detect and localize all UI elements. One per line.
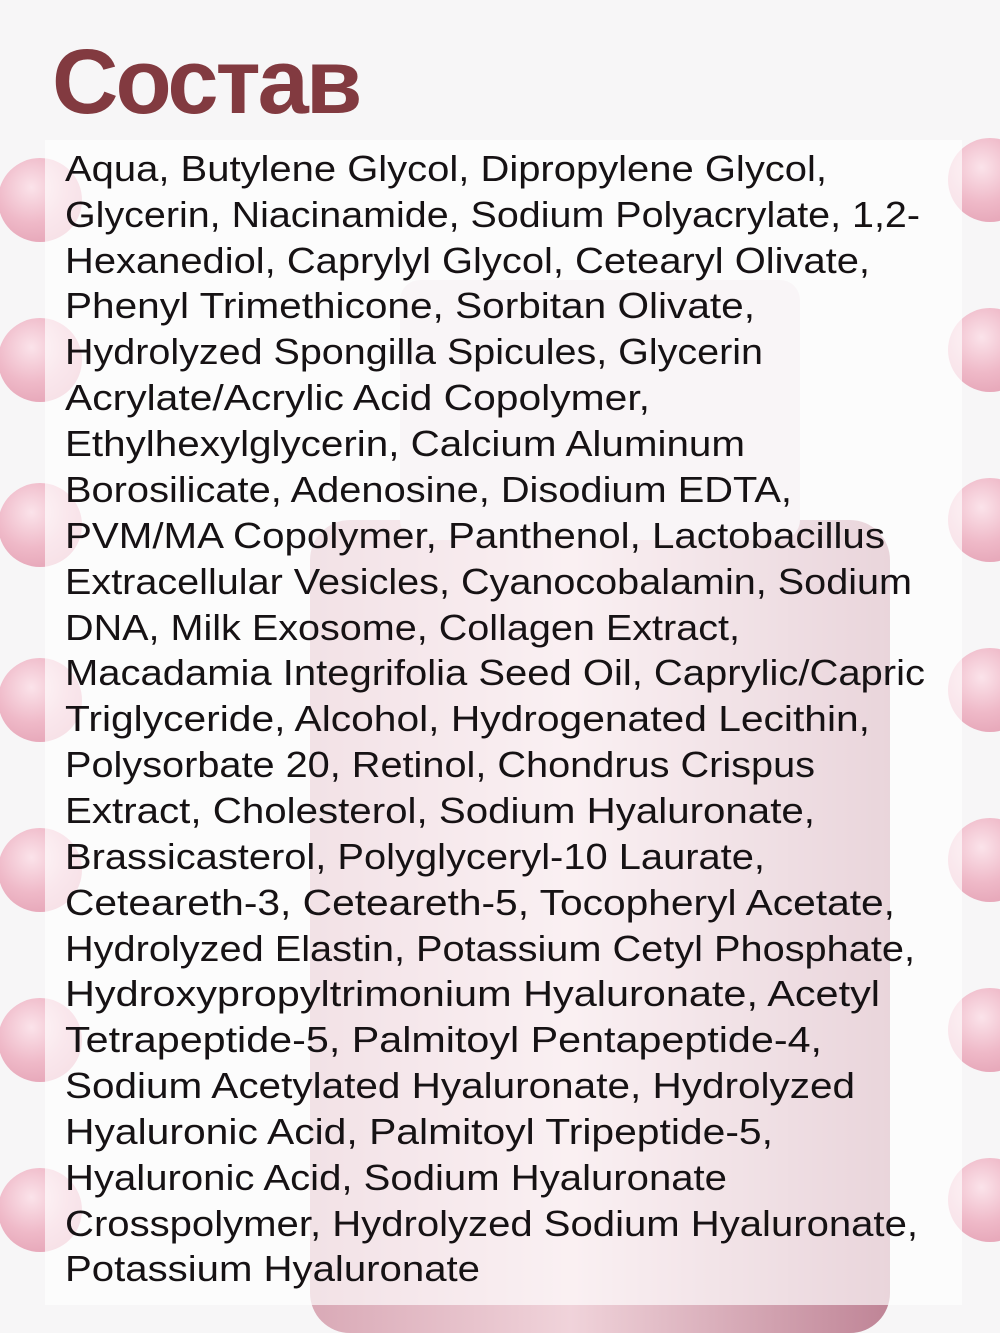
text block: ingredients: Brassicasterol, Polyglyceryl-10 Laurate, [65, 836, 765, 877]
text block: ingredients: Crosspolymer, Hydrolyzed Sodium Hyaluronate, [65, 1203, 918, 1244]
text block: ingredients: Ethylhexylglycerin, Calcium Aluminum [65, 423, 745, 464]
text block: ingredients: PVM/MA Copolymer, Panthenol, Lactobacillus [65, 515, 885, 556]
text block: ingredients: Acrylate/Acrylic Acid Copolymer, [65, 377, 650, 418]
text block: ingredients: Hydrolyzed Spongilla Spicules, Glycerin [65, 331, 763, 372]
text block: ingredients: Hyaluronic Acid, Palmitoyl Tripeptide-5, [65, 1111, 773, 1152]
text block: ingredients: DNA, Milk Exosome, Collagen Extract, [65, 607, 740, 648]
text block: ingredients: Ceteareth-3, Ceteareth-5, Tocopheryl Acetate, [65, 882, 895, 923]
text block: ingredients: Glycerin, Niacinamide, Sodium Polyacrylate, 1,2- [65, 194, 920, 235]
text block: ingredients: Hydroxypropyltrimonium Hyaluronate, Acetyl [65, 973, 880, 1014]
text block: ingredients: Triglyceride, Alcohol, Hydrogenated Lecithin, [65, 698, 870, 739]
text block: ingredients: Hyaluronic Acid, Sodium Hyaluronate [65, 1157, 727, 1198]
text block: ingredients: Potassium Hyaluronate [65, 1248, 480, 1289]
text block: ingredients: Extract, Cholesterol, Sodium Hyaluronate, [65, 790, 815, 831]
text block: ingredients: Sodium Acetylated Hyaluronate, Hydrolyzed [65, 1065, 855, 1106]
text block: ingredients: Borosilicate, Adenosine, Disodium EDTA, [65, 469, 792, 510]
text block: ingredients: Extracellular Vesicles, Cyanocobalamin, Sodium [65, 561, 912, 602]
text block: ingredients: Phenyl Trimethicone, Sorbitan Olivate, [65, 285, 755, 326]
text block: ingredients: Tetrapeptide-5, Palmitoyl Pentapeptide-4, [65, 1019, 822, 1060]
text block: ingredients: Aqua, Butylene Glycol, Dipropylene Glycol, [65, 148, 827, 189]
text block: ingredients: Polysorbate 20, Retinol, Chondrus Crispus [65, 744, 815, 785]
text block: ingredients: Hydrolyzed Elastin, Potassium Cetyl Phosphate, [65, 928, 915, 969]
text block: ingredients: Macadamia Integrifolia Seed Oil, Caprylic/Capric [65, 652, 925, 693]
text block: ingredients: Hexanediol, Caprylyl Glycol, Cetearyl Olivate, [65, 240, 870, 281]
title: Состав [52, 31, 359, 133]
